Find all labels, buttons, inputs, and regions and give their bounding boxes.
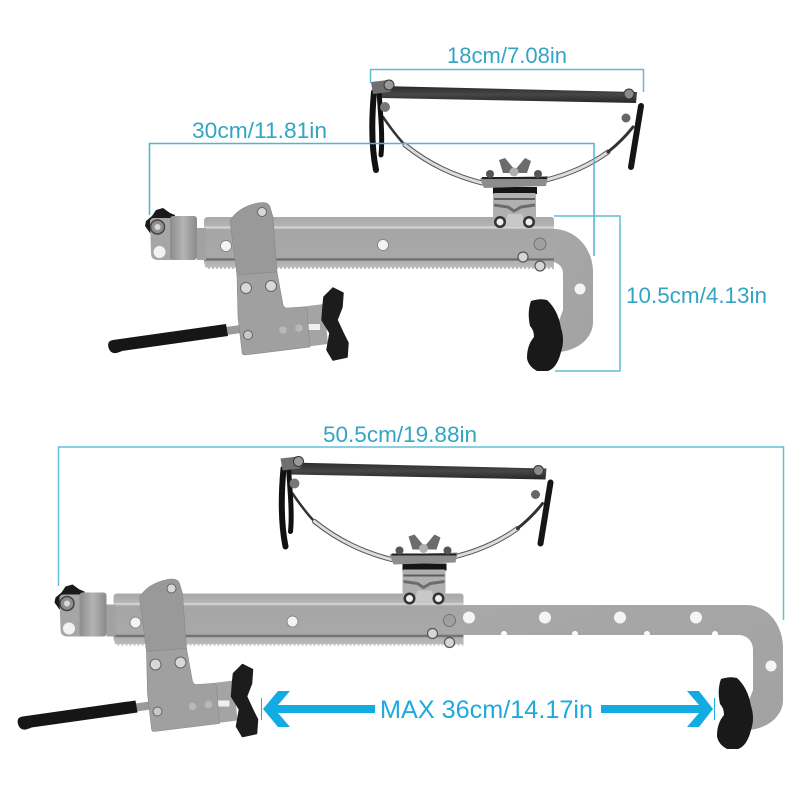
frame bar	[380, 86, 637, 103]
dimension: 30cm: 30cm/11.81in	[192, 118, 327, 143]
bottom hook jaw knob	[717, 677, 753, 749]
handle	[108, 324, 241, 353]
dimension: 18cm	[370, 43, 644, 92]
bottom extended arm	[455, 605, 783, 730]
arrow left	[262, 691, 375, 727]
curved tension band	[383, 117, 633, 183]
rail connector	[197, 228, 206, 260]
bottom tool body	[18, 456, 551, 736]
frame left loop	[372, 90, 382, 170]
dimension: 50.5cm	[58, 422, 784, 620]
max label: MAX 36cm/14.17in	[380, 696, 593, 724]
end clamp	[150, 216, 197, 260]
top tool body	[108, 80, 641, 360]
sliding plate lower	[237, 272, 310, 355]
dimension: 50.5cm: 50.5cm/19.88in	[323, 422, 477, 447]
dimension: 18cm: 18cm/7.08in	[447, 43, 567, 68]
top hook arm	[545, 229, 593, 352]
dimension: 30cm	[150, 118, 594, 256]
top hook jaw knob	[527, 299, 563, 371]
sliding plate upper	[230, 202, 277, 275]
arrow right	[601, 691, 714, 727]
rail	[204, 217, 554, 271]
dimension: 10.5cm	[554, 216, 767, 371]
band bracket and wing nut	[480, 158, 548, 188]
frame fittings	[371, 80, 634, 122]
left jaw knob	[322, 288, 348, 360]
clamp block	[493, 187, 537, 228]
dimension: max opening arrows	[262, 691, 714, 727]
dimension: 10.5cm: 10.5cm/4.13in	[626, 283, 767, 308]
sliding jaw arm	[300, 304, 328, 347]
frame right arm	[631, 106, 641, 167]
bottom arm first hole	[463, 612, 475, 624]
end clamp knob	[145, 208, 175, 233]
